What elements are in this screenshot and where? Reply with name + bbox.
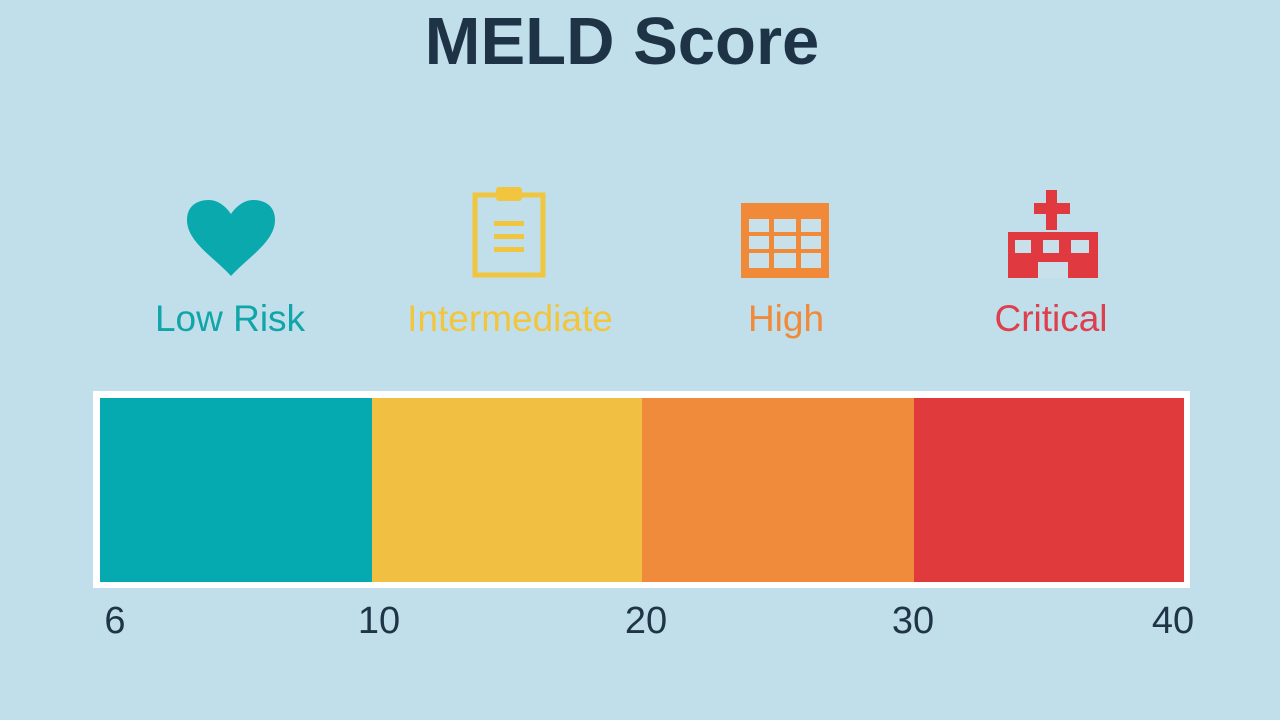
icon: clipboard [472, 187, 546, 278]
segment: intermediate [372, 398, 642, 582]
segment: critical [914, 398, 1184, 582]
scale bar [93, 391, 1190, 588]
label: high: High [748, 298, 824, 339]
segment: high [642, 398, 914, 582]
tick 20: 20 [625, 600, 667, 642]
icon: calendar [741, 203, 829, 278]
label: low risk: Low Risk [155, 298, 305, 339]
tick 10: 10 [358, 600, 400, 642]
tick 6: 6 [104, 600, 126, 642]
segment: low [100, 398, 372, 582]
title: MELD Score [425, 4, 819, 79]
label: critical: Critical [994, 298, 1108, 339]
label: intermediate: Intermediate [407, 298, 613, 339]
icon: hospital [1008, 190, 1098, 278]
tick 30: 30 [892, 600, 934, 642]
tick 40: 40 [1152, 600, 1194, 642]
icon: heart [187, 200, 275, 276]
